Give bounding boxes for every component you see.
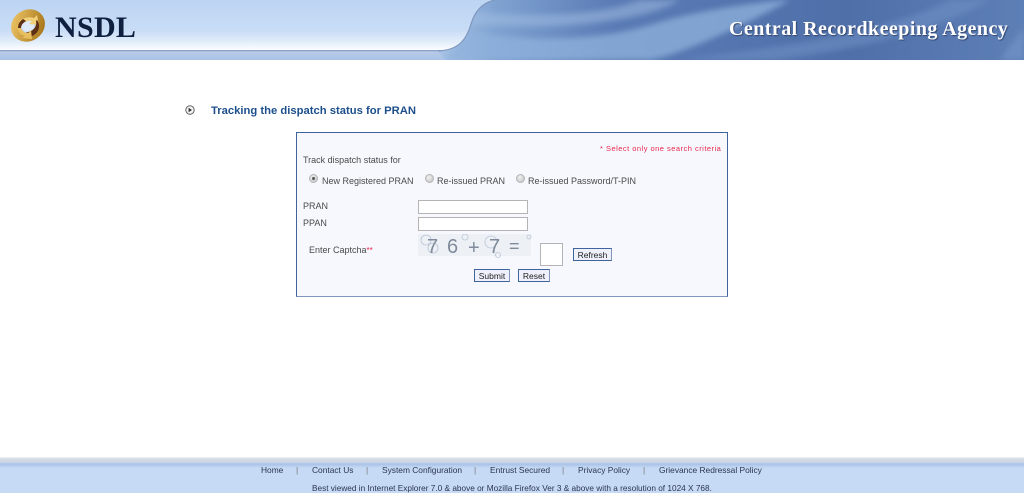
captcha image: 6 xyxy=(447,236,458,258)
footer band xyxy=(0,457,1024,493)
header title: Central Recordkeeping Agency xyxy=(729,18,1008,40)
button: reset xyxy=(518,269,550,282)
footer links: Privacy Policy xyxy=(578,465,630,475)
footer links: Grievance Redressal Policy xyxy=(659,465,762,475)
NSDL logo xyxy=(11,9,136,44)
footer links: | xyxy=(643,465,645,475)
captcha image: 7 xyxy=(489,236,500,258)
captcha image: 7 xyxy=(427,236,438,258)
footer links: Home xyxy=(261,465,283,475)
button: submit xyxy=(474,269,510,282)
heading text: Tracking the dispatch status for PRAN xyxy=(211,105,416,117)
button: reset: Reset xyxy=(523,271,545,281)
icon: NSDL gold ring xyxy=(11,9,45,42)
option: new registered PRAN: New Registered PRAN xyxy=(322,176,414,186)
footer links: Entrust Secured xyxy=(490,465,550,475)
footer links: | xyxy=(562,465,564,475)
label: track dispatch: Track dispatch status for xyxy=(303,155,401,165)
footer links: | xyxy=(474,465,476,475)
button: refresh xyxy=(573,248,612,261)
header banner xyxy=(0,0,1024,60)
field: PPAN xyxy=(303,217,528,231)
dark blue swoosh panel xyxy=(438,0,1024,60)
option: re-issued PRAN: Re-issued PRAN xyxy=(437,176,505,186)
footer links: Contact Us xyxy=(312,465,353,475)
captcha image xyxy=(418,234,532,258)
footer links: | xyxy=(296,465,298,475)
logo wordmark: NSDL xyxy=(55,11,136,44)
note: search criteria: * Select only one search criteria xyxy=(600,144,721,153)
field: PRAN xyxy=(303,200,528,214)
footer note: Best viewed in Internet Explorer 7.0 & above or Mozilla Firefox Ver 3 & above with a resolution of 1024 X 768. xyxy=(312,484,712,493)
field: PPAN: PPAN xyxy=(303,218,327,228)
icon: bullet arrow xyxy=(185,105,195,115)
option: re-issued password: Re-issued Password/T-PIN xyxy=(528,176,636,186)
field: PRAN: PRAN xyxy=(303,201,328,211)
captcha image: = xyxy=(509,236,520,256)
page heading xyxy=(185,105,416,117)
footer links: | xyxy=(366,465,368,475)
button: refresh: Refresh xyxy=(578,250,607,260)
button: submit: Submit xyxy=(479,271,505,281)
panel: search form xyxy=(296,132,728,297)
label: enter captcha: Enter Captcha** xyxy=(309,245,373,255)
footer links xyxy=(261,465,762,475)
footer links: System Configuration xyxy=(382,465,462,475)
captcha input xyxy=(540,243,563,266)
